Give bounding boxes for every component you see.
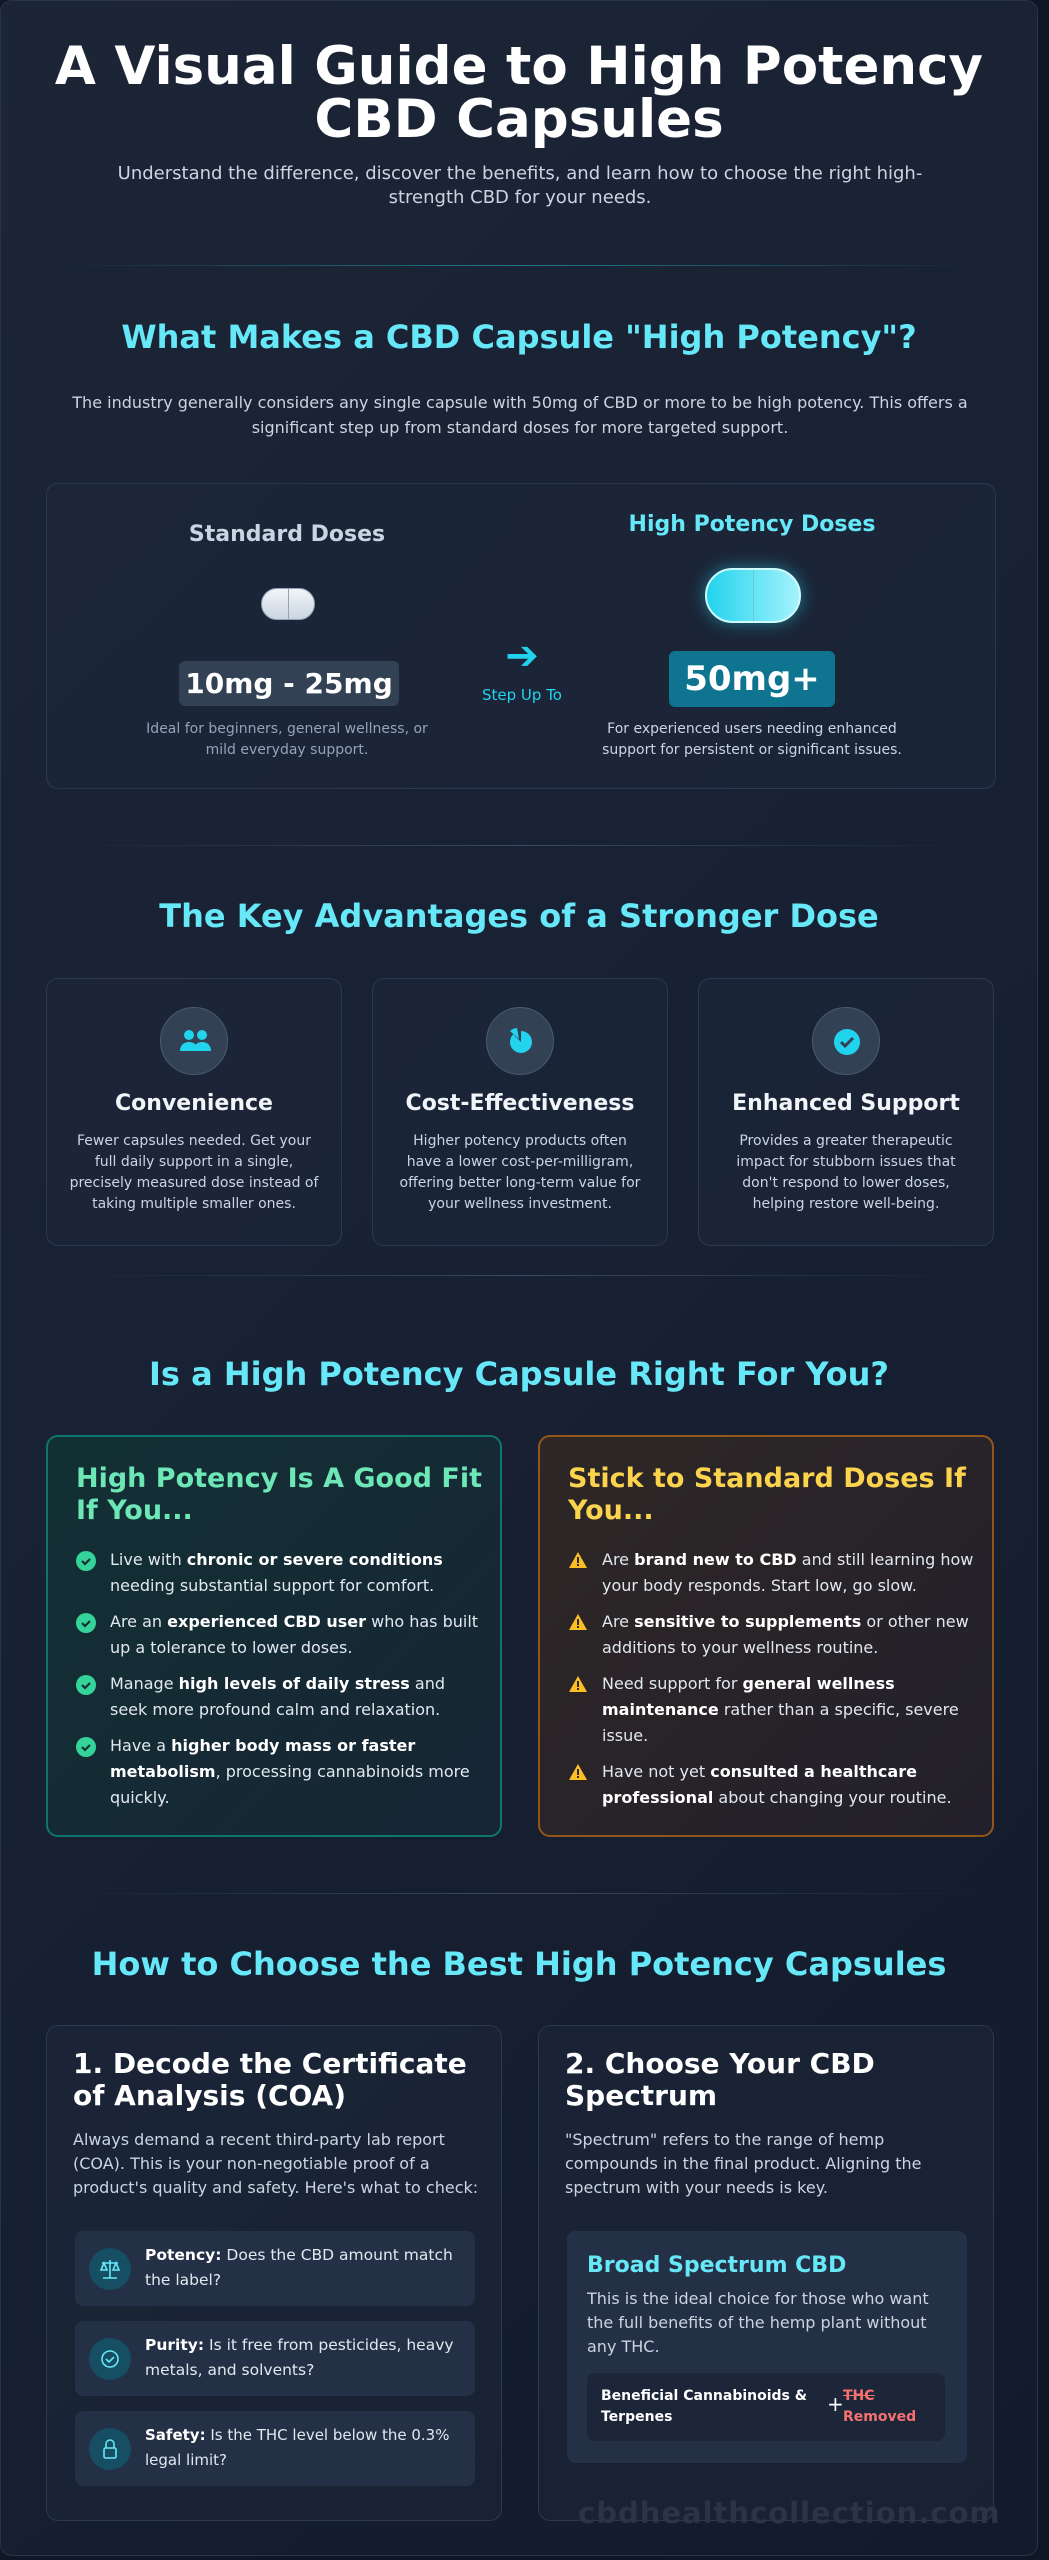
high potency heading: High Potency Doses [629,512,875,537]
title [55,36,983,150]
panel: good fit: High Potency Is A Good Fit If You... [76,1463,482,1526]
icon: people [160,1007,228,1075]
panel: good fit [46,1435,502,1837]
heading: right for you: Is a High Potency Capsule Right For You? [149,1355,889,1393]
title: A Visual Guide to High Potency [55,36,983,97]
badge: 50mg+: 50mg+ [684,659,820,699]
formula: Removed [843,2409,916,2425]
formula: THC [843,2388,875,2404]
panel: stick to standard: Are brand new to CBD and still learning how your body responds. Start low, go slow. [602,1550,973,1595]
formula [587,2373,945,2441]
broad spectrum box: This is the ideal choice for those who want the full benefits of the hemp plant without any THC. [587,2289,929,2356]
arrow: step up: ➔ [505,633,539,679]
heading: how to choose: How to Choose the Best High Potency Capsules [92,1945,946,1983]
item: potency: Potency: Does the CBD amount match the label? [145,2246,453,2289]
panel: stick to standard [538,1435,994,1837]
arrow: step up: Step Up To [482,686,562,704]
panel: dose comparison [46,483,996,789]
panel: stick to standard: Stick to Standard Doses If You... [568,1463,966,1526]
badge: 50mg+ [669,651,835,707]
high potency description: For experienced users needing enhanced support for persistent or significant issues. [602,721,902,758]
panel: decode COA: 1. Decode the Certificate of Analysis (COA) [73,2047,467,2112]
intro paragraph: The industry generally considers any single capsule with 50mg of CBD or more to be high potency. This offers a significant step up from standard doses for more targeted support. [72,393,968,437]
item: safety [75,2411,475,2486]
heading: what makes high potency: What Makes a CBD Capsule "High Potency"? [121,318,917,356]
item: potency [75,2231,475,2306]
panel: stick to standard: Need support for general wellness maintenance rather than a specific, severe issue. [602,1674,959,1745]
panel: stick to standard: Have not yet consulted a healthcare professional about changing your routine. [602,1762,952,1807]
title: CBD Capsules [314,89,724,150]
arrow: step up [482,633,562,704]
standard description: Ideal for beginners, general wellness, or mild everyday support. [146,721,428,758]
panel: good fit: Have a higher body mass or faster metabolism, processing cannabinoids more quickly. [110,1736,470,1807]
formula: + [827,2392,844,2416]
standard doses heading: Standard Doses [189,522,385,547]
panel: convenience [46,978,342,1246]
item: safety: Safety: Is the THC level below the 0.3% legal limit? [145,2426,449,2469]
panel: decode COA [46,2025,502,2521]
icon: small capsule [261,588,315,620]
item: purity: Purity: Is it free from pesticides, heavy metals, and solvents? [145,2336,454,2379]
panel: good fit: Are an experienced CBD user who has built up a tolerance to lower doses. [110,1612,478,1657]
panel: choose spectrum: "Spectrum" refers to the range of hemp compounds in the final product. Aligning the spectrum with your needs is key. [565,2130,921,2197]
item: purity [75,2321,475,2396]
icon: pie [486,1007,554,1075]
panel: enhanced support: Enhanced Support [732,1091,960,1116]
panel: cost-effectiveness [372,978,668,1246]
panel: choose spectrum [538,2025,994,2521]
panel: stick to standard: Are sensitive to supplements or other new additions to your wellness routine. [602,1612,969,1657]
panel: good fit: Live with chronic or severe conditions needing substantial support for comfort. [110,1550,443,1595]
badge: 10mg-25mg: 10mg - 25mg [185,667,393,700]
panel: convenience: Fewer capsules needed. Get your full daily support in a single, precisely measured dose instead of taking multiple smaller ones. [70,1133,318,1212]
subtitle: Understand the difference, discover the benefits, and learn how to choose the right high-strength CBD for your needs. [118,163,922,208]
panel: enhanced support: Provides a greater therapeutic impact for stubborn issues that don't respond to lower doses, helping restore well-being. [736,1133,956,1212]
panel: cost-effectiveness: Higher potency products often have a lower cost-per-milligram, offering better long-term value for your wellness investment. [400,1133,640,1212]
icon: large capsule [705,568,801,623]
heading: advantages: The Key Advantages of a Stronger Dose [159,897,879,935]
panel: convenience: Convenience [115,1091,273,1116]
broad spectrum box [567,2231,967,2463]
broad spectrum box: Broad Spectrum CBD [587,2253,846,2278]
panel: decode COA: Always demand a recent third-party lab report (COA). This is your non-negotiable proof of a product's quality and safety. Here's what to check: [73,2130,478,2197]
icon: badge check [812,1007,880,1075]
watermark: cbdhealthcollection.com [578,2496,1001,2530]
panel: cost-effectiveness: Cost-Effectiveness [406,1091,634,1116]
formula: Beneficial Cannabinoids & Terpenes [601,2388,807,2425]
panel: good fit: Manage high levels of daily stress and seek more profound calm and relaxation. [110,1674,445,1719]
panel: choose spectrum: 2. Choose Your CBD Spectrum [565,2047,875,2112]
panel: enhanced support [698,978,994,1246]
badge: 10mg-25mg [179,661,399,706]
